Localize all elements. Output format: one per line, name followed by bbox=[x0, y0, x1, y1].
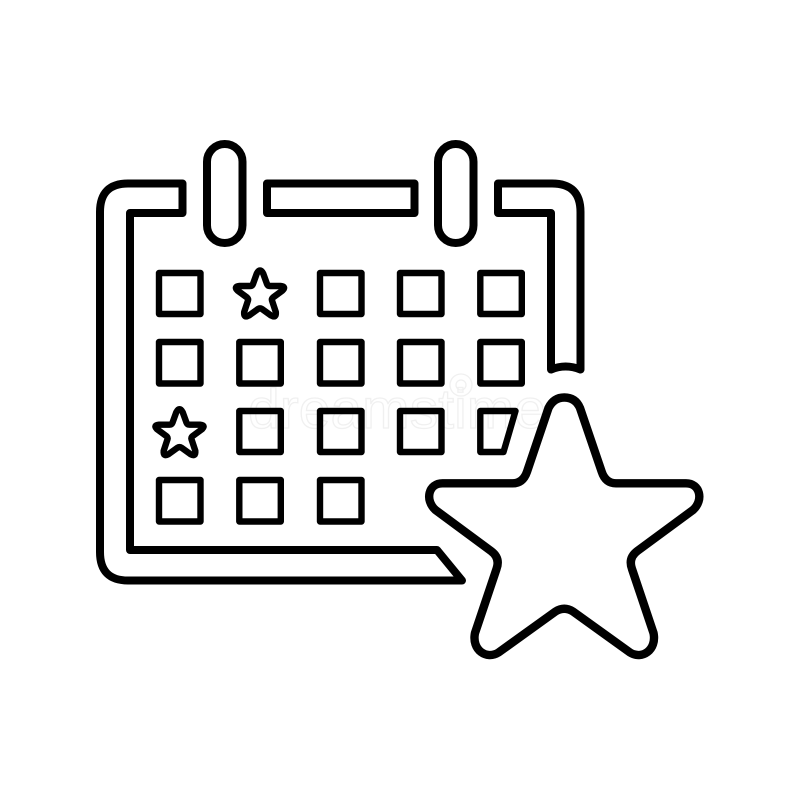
watermark: dreamstime bbox=[248, 377, 546, 440]
row 1 bbox=[159, 270, 522, 316]
binding ring left bbox=[207, 144, 242, 243]
date grid bbox=[155, 270, 522, 522]
binding ring right bbox=[438, 144, 474, 243]
calendar frame: top right bbox=[498, 184, 580, 370]
row 2 bbox=[159, 342, 522, 384]
large star bbox=[429, 398, 699, 655]
calendar bbox=[100, 144, 580, 580]
calendar frame: left and bottom bbox=[100, 184, 462, 580]
calendar top bar bbox=[267, 184, 414, 213]
row 4 bbox=[159, 480, 362, 522]
row 3 bbox=[155, 409, 516, 455]
